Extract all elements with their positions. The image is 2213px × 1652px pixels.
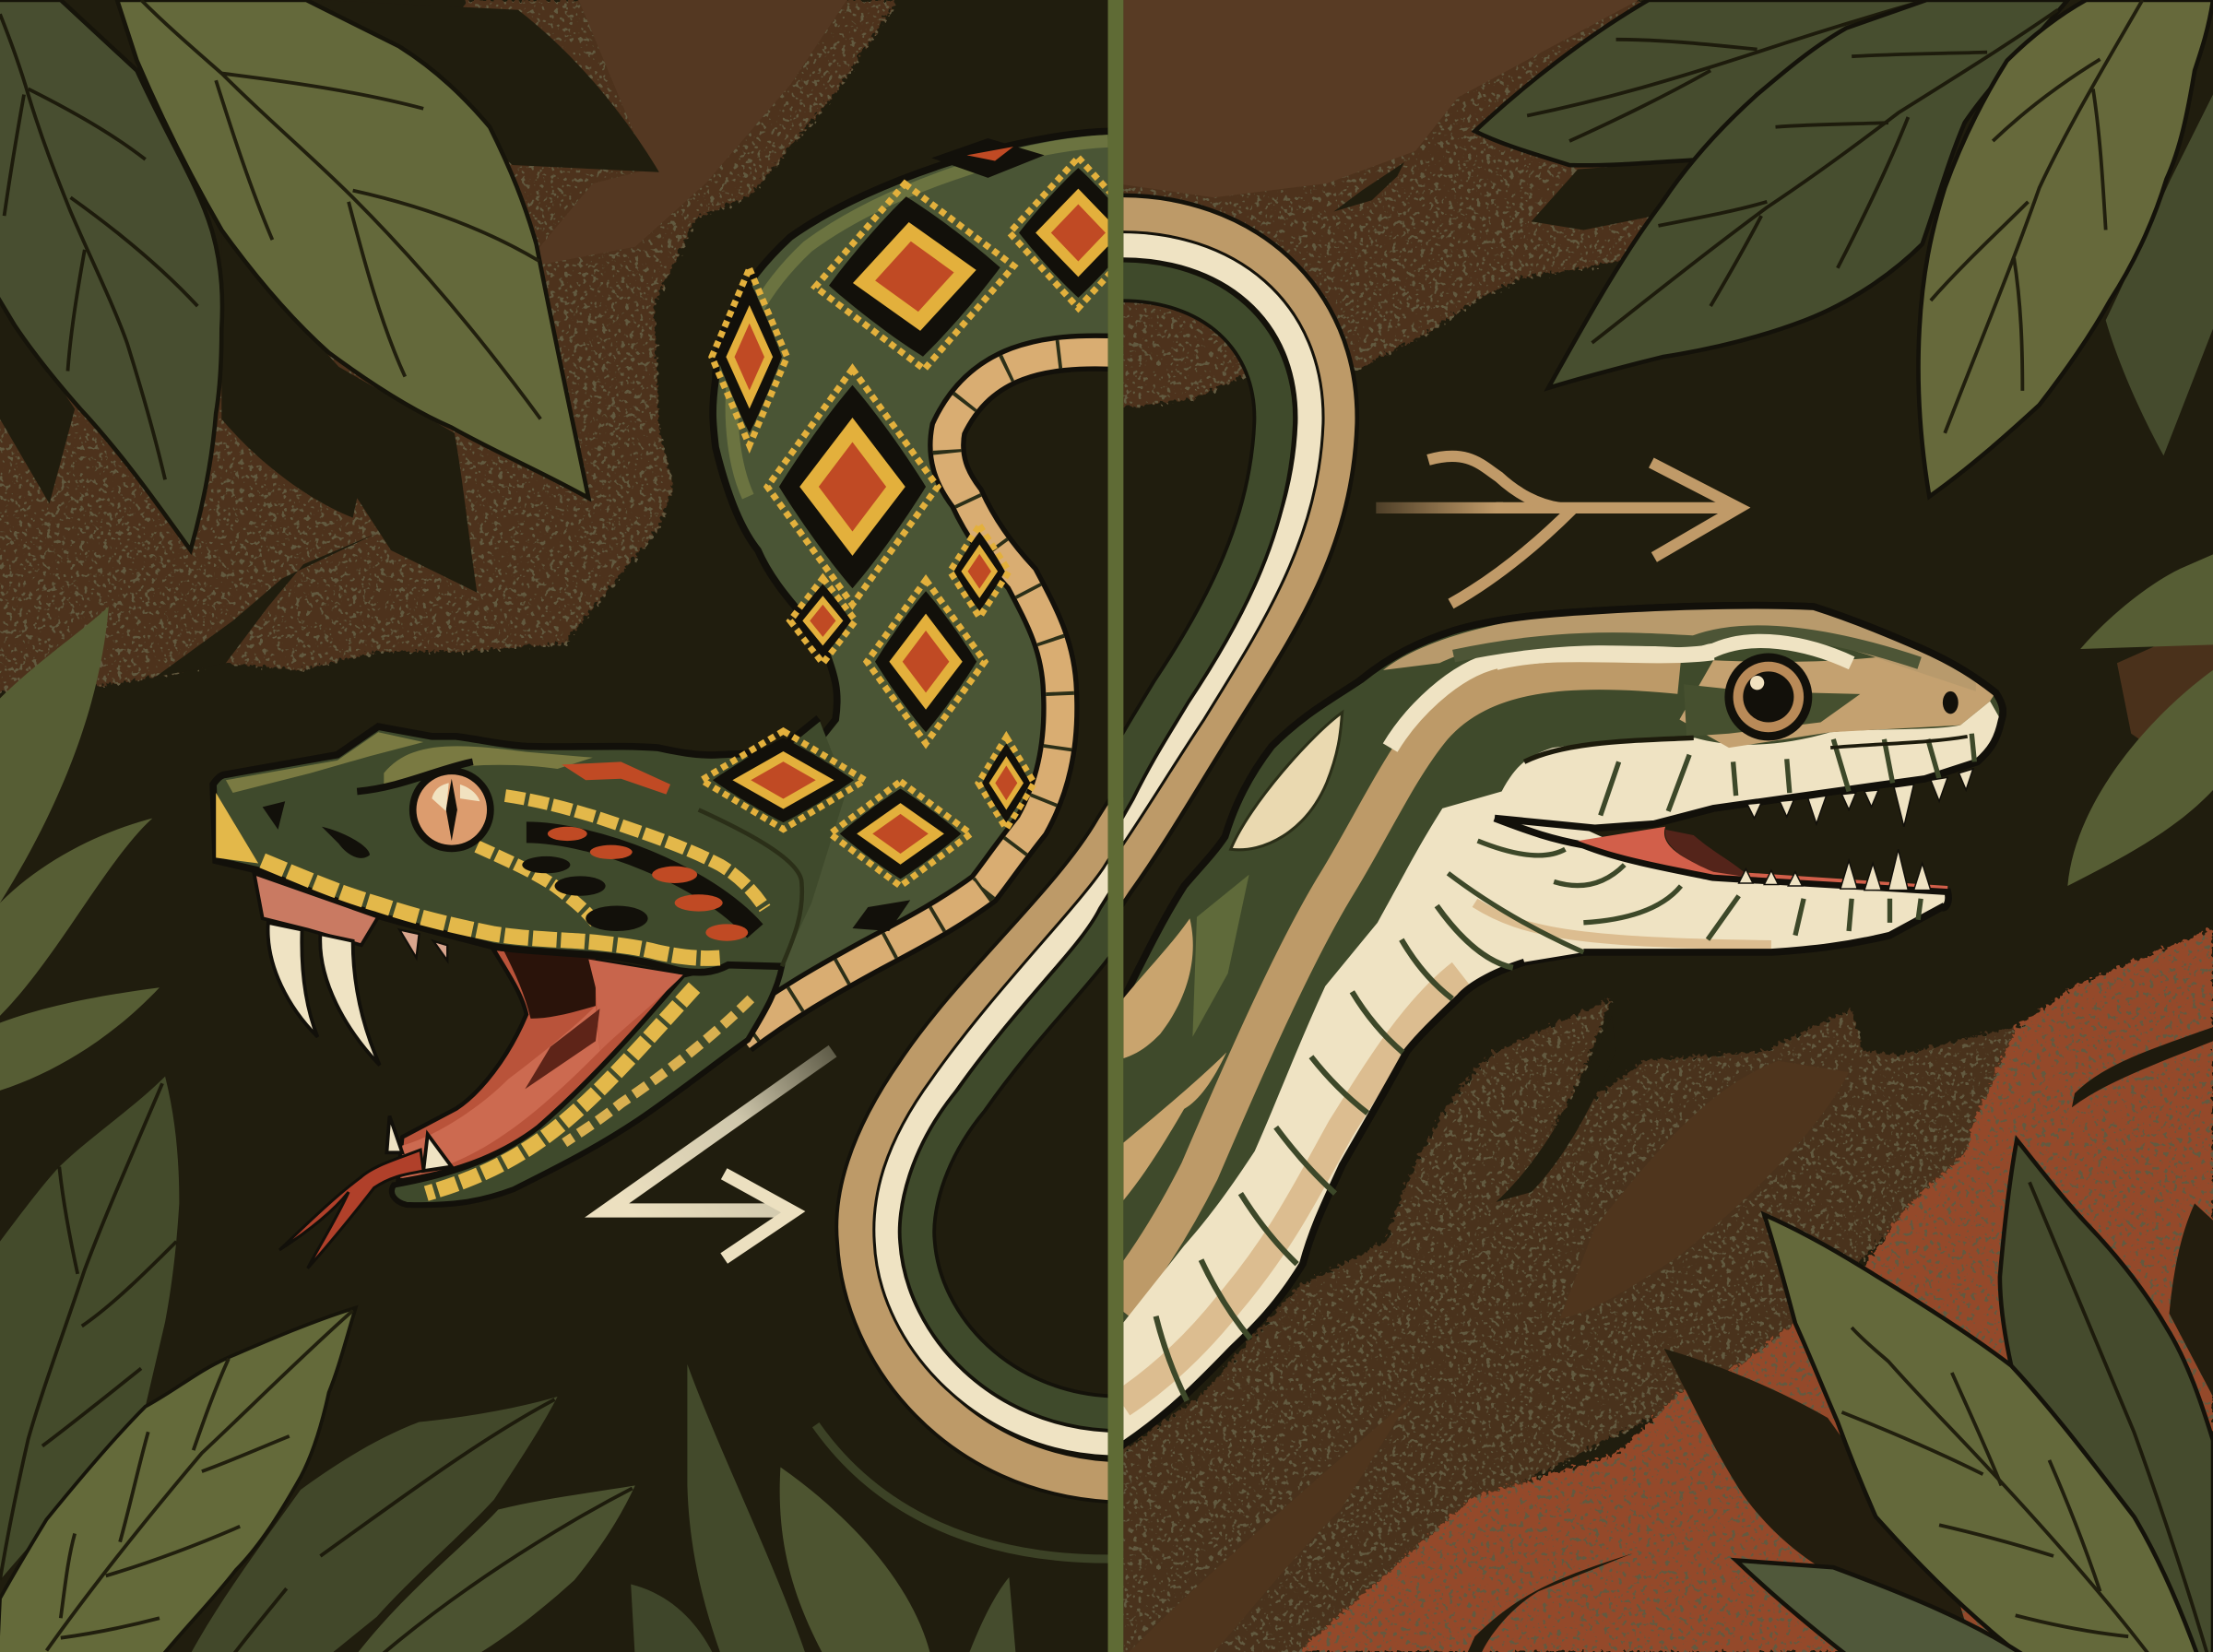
body: belly stripe	[741, 352, 1115, 1037]
leaf: bottom second	[353, 1485, 635, 1652]
arrow: tan right	[1376, 456, 1739, 604]
teeth: upper	[1747, 769, 1973, 827]
fang: rear	[320, 934, 380, 1065]
body: tan patch lower	[1115, 1053, 1226, 1210]
lower fangs	[386, 1115, 452, 1171]
head: viper upper	[213, 718, 846, 973]
head: crown strip	[1383, 606, 1976, 691]
small teeth	[399, 929, 447, 961]
leaf: top-left large light	[117, 0, 588, 498]
mouth: dark throat	[1665, 830, 1750, 878]
body: tan stripe	[1115, 670, 1679, 1305]
snake: viper body	[713, 131, 1115, 1037]
panel: right jungle	[1087, 0, 2213, 1652]
head: outline	[213, 718, 819, 973]
snake: harmless body	[1115, 606, 2003, 1450]
head: eye	[1724, 654, 1812, 740]
leaf: bottom right small	[1736, 1561, 2030, 1652]
leaves: far right middle	[2067, 554, 2213, 886]
head: tan snout	[1679, 652, 1995, 748]
shadow: dark leaf shadows	[0, 0, 659, 678]
leaf: top right dark tip	[1474, 0, 1926, 202]
rock: lighter brown upper	[1115, 0, 1639, 197]
head: lower yellow scale line	[477, 846, 596, 923]
rock: dark crack	[1333, 162, 1404, 212]
head: eye	[357, 761, 494, 852]
leaf: top-left dark	[0, 0, 222, 550]
head: eye stripe	[1684, 684, 1860, 737]
head: upper yellow scale line	[505, 796, 765, 909]
body: cream patch	[1231, 713, 1343, 850]
leaf: top right light	[1919, 0, 2213, 497]
rock: lighter brown streaks	[1129, 1061, 1849, 1652]
head: lip scales	[263, 860, 720, 958]
gum	[254, 873, 378, 945]
body: neck edge outline	[1115, 962, 1524, 1450]
body: diamonds	[702, 138, 1147, 931]
leaf: bottom-left large	[0, 1308, 356, 1652]
mouth: open interior	[398, 948, 683, 1181]
rock: brown earth top right	[1115, 0, 1694, 409]
teeth: lower	[1739, 849, 1931, 891]
fang: front	[268, 923, 317, 1037]
body: cream belly	[1115, 792, 1623, 1450]
head: black band	[527, 832, 755, 931]
rock: small brown far right	[2117, 620, 2213, 790]
body: belly ribs	[1156, 905, 1513, 1401]
body: olive highlight	[731, 141, 1108, 497]
arrow: cream left	[607, 1051, 833, 1258]
rock: brown earth lower right	[1115, 998, 2032, 1652]
leaf: bottom-left tall	[0, 1077, 179, 1580]
head: crown red mark	[562, 761, 670, 795]
head: snout plate	[216, 793, 258, 864]
leaf: bottom right dark	[2000, 1139, 2213, 1652]
ribbon: harmless snake upper loop	[1087, 215, 1338, 924]
head: upper jaw ticks	[1601, 734, 1974, 816]
rock: lighter brown streak	[522, 0, 846, 268]
leaves: left middle	[0, 607, 160, 1091]
body: belly wash	[1122, 974, 1461, 1404]
head: cream face	[1495, 702, 2001, 828]
tongue	[279, 1150, 423, 1268]
leaf: far right dark	[2170, 1203, 2213, 1397]
ribbon: harmless snake tail loop left	[858, 773, 1150, 1481]
head: olive crown	[226, 732, 593, 793]
leaf: bottom dark	[188, 1397, 558, 1652]
head: mouth line	[1830, 737, 1968, 748]
lower jaw	[392, 965, 782, 1205]
lower jaw: harmless	[1439, 811, 1948, 952]
body: olive brush	[1192, 875, 1249, 1037]
rock: dark gash	[1496, 1016, 1616, 1202]
rock: rust red	[1298, 928, 2213, 1652]
divider	[1108, 0, 1123, 1652]
shadow: under top leaves	[1532, 159, 1705, 230]
head: thin green line	[1454, 631, 1920, 663]
head: red scale marks	[548, 827, 748, 941]
head: black blotches	[522, 856, 648, 931]
panel: left jungle	[0, 0, 1150, 1652]
rock: brown earth upper left	[0, 0, 897, 691]
shadow: leaf on rust	[1664, 1349, 1976, 1652]
head: lower jaw ticks	[1448, 841, 1921, 952]
snake shadow arc	[816, 1425, 1108, 1559]
head: harmless upper	[1361, 606, 2003, 952]
leaves: bottom center	[631, 1364, 1016, 1652]
body: cream thin stripe	[1391, 652, 1713, 748]
leaf: bottom right large	[1764, 1215, 2199, 1652]
head: green jaw line	[1524, 738, 1694, 761]
head: nostril and pit	[263, 801, 370, 858]
leaf: top right large dark	[1548, 0, 2067, 388]
head: top outline	[1361, 606, 2003, 828]
body: tan patch upper	[1115, 918, 1193, 1061]
head: jaw line	[699, 809, 802, 966]
head: nostril	[1943, 691, 1959, 714]
mouth: tongue area	[1578, 827, 1947, 889]
leaf: far right top	[2106, 95, 2213, 455]
head: cream brow line	[1496, 641, 1852, 663]
